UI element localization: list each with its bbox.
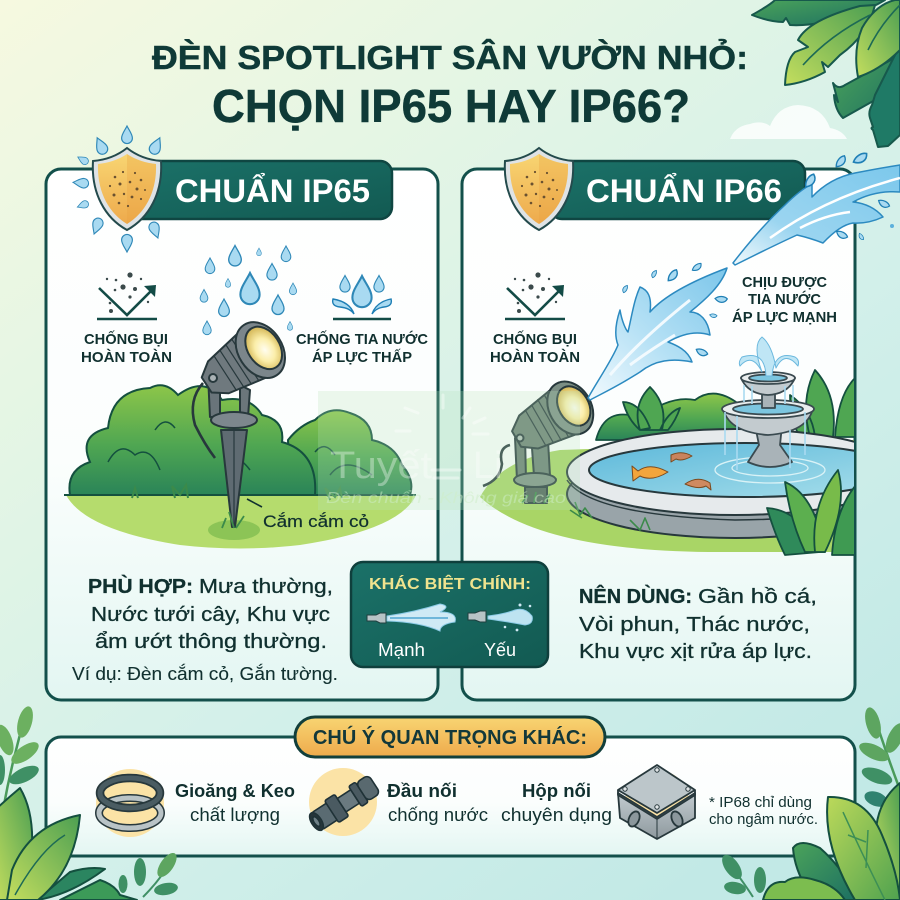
text: Nên dùng <box>579 584 817 663</box>
text: Gioăng & Keo: Gioăng & Keo <box>175 781 295 801</box>
watermark <box>318 391 580 510</box>
text: Gioăng & Keo <box>175 781 295 825</box>
banner: CHUẨN IP66: CHUẨN IP66 <box>586 173 782 209</box>
label: Chịu được tia nước áp lực mạnh: TIA NƯỚC <box>748 290 821 308</box>
label: Chống bụi <box>81 330 172 366</box>
text: Hộp nối <box>501 781 612 825</box>
droplets around shield <box>73 126 165 252</box>
label: Chống bụi <box>490 330 580 366</box>
banner: CHUẨN IP65 <box>130 161 392 219</box>
text: Phù hợp: Ví dụ: Đèn cắm cỏ, Gắn tường. <box>72 663 338 684</box>
icon: rain drops <box>200 246 297 335</box>
callout: Cắm cắm cỏ: Cắm cắm cỏ <box>263 512 369 531</box>
text: Phù hợp: Nước tưới cây, Khu vực <box>91 604 330 626</box>
text: Hộp nối: Hộp nối <box>522 781 591 801</box>
text: IP68 note: * IP68 chỉ dùng <box>709 795 812 811</box>
illustration: bushes and lawn <box>64 385 416 548</box>
watermark: Li <box>473 445 503 487</box>
text: Phù hợp: ẩm ướt thông thường. <box>95 631 327 653</box>
icon: dust protection <box>505 272 565 319</box>
panel card IP65 <box>46 169 438 700</box>
panel: chú ý quan trọng <box>46 717 855 856</box>
text: Phù hợp: Mưa thường, <box>199 576 333 598</box>
text: Nên dùng: NÊN DÙNG: <box>579 584 692 608</box>
label: Chịu được tia nước áp lực mạnh: ÁP LỰC MẠNH <box>732 309 837 326</box>
title: CHỌN IP65 HAY IP66? <box>212 80 690 132</box>
icon: shield IP66 <box>505 148 573 230</box>
text: Nên dùng: Vòi phun, Thác nước, <box>579 614 810 636</box>
callout: khác biệt chính <box>351 562 548 667</box>
text: Nên dùng: Khu vực xịt rửa áp lực. <box>579 641 812 663</box>
icon: dust protection <box>97 272 157 319</box>
watermark: Tuyết <box>330 445 432 487</box>
panel card notes <box>46 737 855 856</box>
title <box>152 39 748 132</box>
text: Gioăng & Keo: chất lượng <box>190 805 280 825</box>
heading pill <box>295 717 605 757</box>
label: Chống bụi: CHỐNG BỤI <box>84 330 168 348</box>
panel: IP65 <box>46 126 438 700</box>
illustration: spotlight IP66 <box>483 373 602 503</box>
label: Chống bụi: CHỐNG BỤI <box>493 330 577 348</box>
callout: khác biệt chính: KHÁC BIỆT CHÍNH: <box>369 574 531 593</box>
fish <box>632 453 711 490</box>
icon: low pressure splash <box>333 276 391 319</box>
label: Chống tia nước áp lực thấp: ÁP LỰC THẤP <box>312 349 412 366</box>
foliage: top right leaves <box>752 0 900 147</box>
panel card IP66 <box>462 169 855 700</box>
text: Phù hợp <box>72 574 338 684</box>
watermark: Đèn chuẩn - Không giá cao <box>326 489 566 507</box>
text: Nên dùng: Gần hồ cá, <box>698 586 817 608</box>
text: Đầu nối: chống nước <box>388 805 488 825</box>
illustration: long water jet <box>733 150 900 265</box>
label: Chống tia nước áp lực thấp: CHỐNG TIA NƯỚC <box>296 330 428 348</box>
icon: junction box <box>618 765 695 839</box>
label: Chống bụi: HOÀN TOÀN <box>490 349 580 366</box>
label: Chịu được tia nước áp lực mạnh: CHỊU ĐƯỢC <box>742 274 827 291</box>
text: Phù hợp: PHÙ HỢP: <box>88 574 193 598</box>
panel: IP66 <box>462 148 900 700</box>
text: IP68 note: cho ngâm nước. <box>709 812 818 828</box>
cloud <box>730 105 847 139</box>
foliage: bottom left leaves <box>0 705 180 900</box>
icon: strong jet <box>367 604 455 631</box>
heading pill: CHÚ Ý QUAN TRỌNG KHÁC: <box>313 725 587 749</box>
illustration: spotlight on spike <box>190 313 295 528</box>
illustration: water jet near lamp <box>588 261 728 400</box>
icon: weak jet <box>468 604 532 631</box>
foreground leaves <box>767 470 856 555</box>
banner: CHUẨN IP66 <box>550 161 805 219</box>
label: Chống bụi: HOÀN TOÀN <box>81 349 172 366</box>
icon: shield IP65 <box>93 148 161 230</box>
label: Chịu được tia nước áp lực mạnh <box>732 274 837 326</box>
callout: khác biệt chính: Yếu <box>484 640 516 660</box>
banner: CHUẨN IP65: CHUẨN IP65 <box>175 173 370 209</box>
foliage: bottom right leaves <box>718 706 900 900</box>
callout: Cắm cắm cỏ <box>247 499 369 531</box>
text: Đầu nối: Đầu nối <box>387 781 457 801</box>
icon: waterproof connector <box>305 768 381 836</box>
icon: gasket rings <box>96 769 164 837</box>
fountain <box>722 372 814 467</box>
callout: khác biệt chính: Mạnh <box>378 640 425 660</box>
text: Hộp nối: chuyên dụng <box>501 805 612 825</box>
illustration: garden pond and fountain <box>480 336 854 556</box>
label: Chống tia nước áp lực thấp <box>296 330 428 366</box>
title: ĐÈN SPOTLIGHT SÂN VƯỜN NHỎ: <box>152 39 748 76</box>
text: IP68 note <box>709 795 818 828</box>
text: Đầu nối <box>387 781 488 825</box>
